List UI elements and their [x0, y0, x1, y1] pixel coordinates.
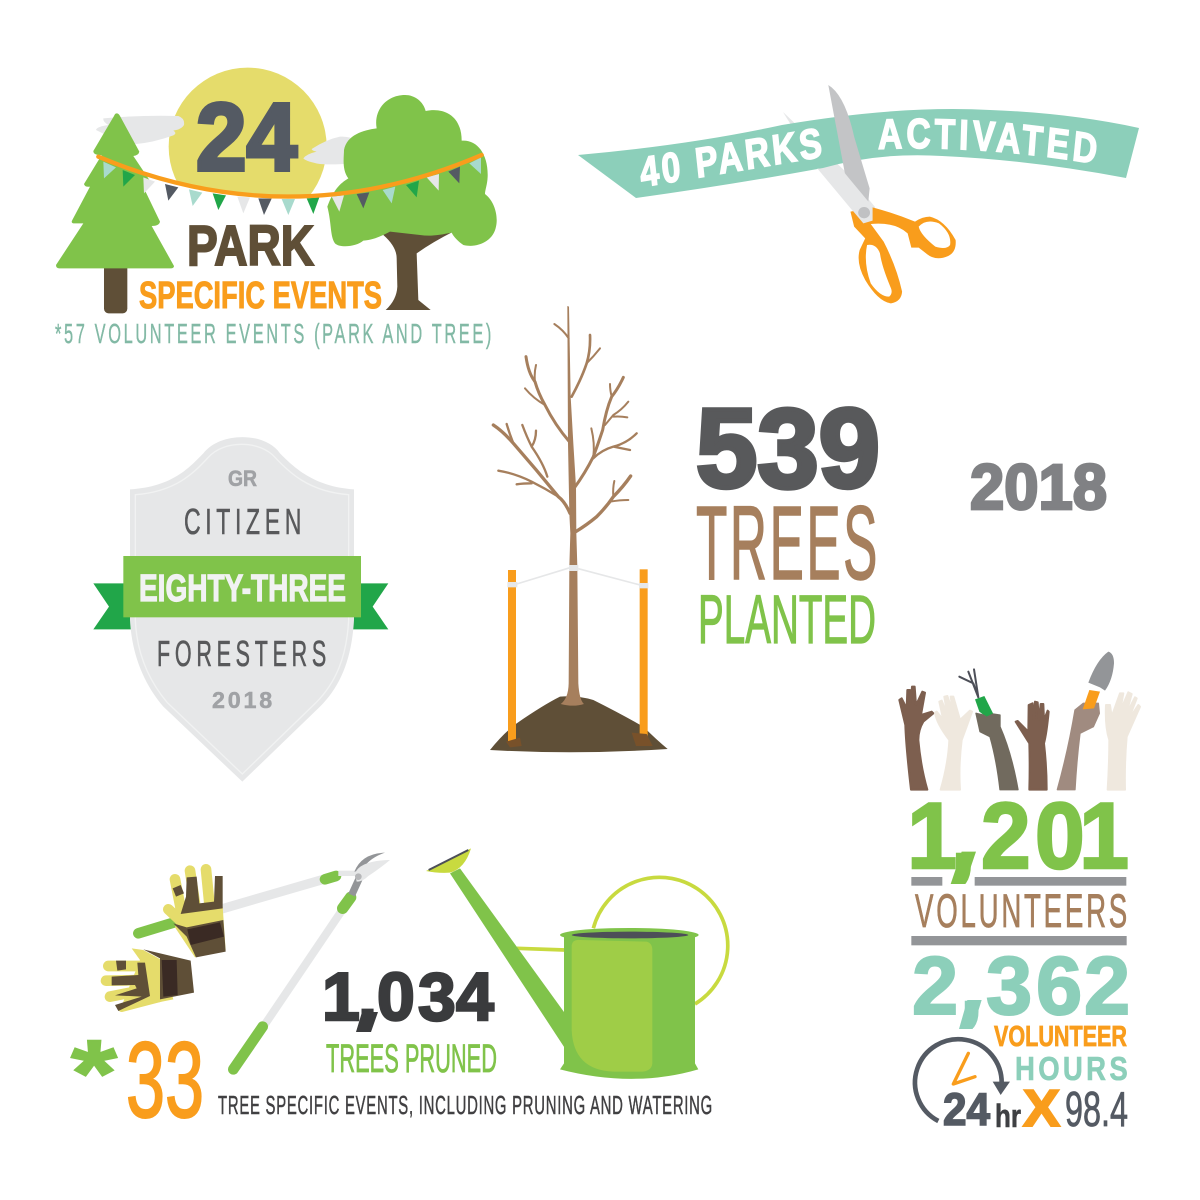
ribbon tails — [93, 583, 388, 629]
bunting flags — [103, 157, 481, 215]
label: PLANTED: PLANTED — [698, 581, 876, 658]
cloud: left — [96, 116, 184, 144]
rake tool — [959, 669, 993, 717]
formula: 24hr x 98.4 — [943, 1080, 1128, 1138]
icon: asterisk: * — [71, 1020, 117, 1126]
text: 2018: 2018 — [212, 687, 275, 713]
label: HOURS: HOURS — [1015, 1050, 1131, 1087]
spout — [450, 868, 565, 1048]
illustration: raised hands with tools — [899, 652, 1140, 790]
scissors: back blade — [783, 112, 875, 223]
glove: upper — [168, 869, 226, 957]
text: EIGHTY-THREE: EIGHTY-THREE — [139, 568, 346, 610]
formula: 24hr x 98.4: X — [1023, 1080, 1060, 1138]
label: TREES PRUNED: TREES PRUNED — [326, 1037, 497, 1081]
ribbon — [578, 109, 1139, 198]
spout rose — [426, 848, 471, 873]
text: TREES — [696, 485, 880, 602]
sun — [168, 68, 326, 194]
text: GR: GR — [228, 466, 257, 491]
formula: 24hr x 98.4: 98.4 — [1065, 1083, 1128, 1137]
hand 1 — [899, 687, 933, 790]
hand 4 — [1016, 702, 1049, 790]
text: FORESTERS: FORESTERS — [157, 633, 331, 674]
formula: 24hr x 98.4: 24 — [943, 1084, 990, 1135]
ribbon text: 40 PARKS — [640, 118, 1097, 186]
panel: tree events stats — [71, 959, 713, 1140]
hand 2 — [935, 696, 972, 790]
panel: citizen foresters shield — [93, 437, 388, 782]
ribbon text: ACTIVATED: ACTIVATED — [878, 118, 1097, 163]
hand 3 — [976, 713, 1018, 790]
panel: 40 parks activated ribbon — [578, 85, 1139, 304]
formula: 24hr x 98.4: hr — [995, 1098, 1021, 1134]
scissors: pivot — [858, 207, 870, 218]
illustration: planted sapling — [490, 306, 668, 752]
note: volunteer events: *57 VOLUNTEER EVENTS (PARK AND TREE) — [55, 318, 494, 349]
hand 5 — [1057, 703, 1099, 790]
caption: tree specific events: TREE SPECIFIC EVENTS, INCLUDING PRUNING AND WATERING — [218, 1090, 713, 1120]
number: 33: 33 — [126, 1019, 204, 1140]
divider bars and commas — [911, 852, 1127, 1029]
icon: clock — [915, 1039, 1010, 1121]
panel: volunteer stats — [907, 784, 1131, 1138]
number: 24: 24 — [196, 84, 297, 191]
cloud: right — [303, 137, 357, 164]
can body — [560, 935, 698, 1079]
trowel tool — [1083, 652, 1114, 709]
scissors: gray blade — [828, 85, 870, 203]
icon: pine tree — [56, 113, 174, 313]
tree ties — [507, 565, 648, 588]
garland string — [98, 155, 482, 197]
loppers — [138, 853, 390, 1069]
highlight panel — [572, 940, 652, 1072]
number: 1,201: 1,201 — [907, 784, 1129, 889]
label: VOLUNTEER: VOLUNTEER — [994, 1021, 1127, 1053]
soil mound — [490, 696, 668, 752]
can rim — [560, 928, 699, 942]
number: 2,362: 2,362 — [912, 939, 1130, 1032]
ribbon text: 40 PARKS: 40 PARKS — [640, 128, 822, 186]
tree trunk and branches — [493, 306, 637, 706]
stake dirt — [506, 733, 653, 747]
text: CITIZEN: CITIZEN — [184, 501, 306, 542]
scissors: orange handles — [850, 207, 956, 303]
can handle — [593, 877, 728, 1004]
icon: watering can — [426, 848, 728, 1079]
number: 539: 539 — [696, 386, 880, 511]
panel: trees planted stat — [696, 386, 880, 658]
illustration: loppers and gloves — [106, 853, 390, 1069]
icon: oak tree — [327, 95, 497, 310]
heading: SPECIFIC EVENTS: SPECIFIC EVENTS — [139, 275, 382, 317]
scissors: light blade base — [817, 168, 873, 223]
badge shape — [93, 437, 388, 782]
shield — [130, 437, 354, 782]
scissors: front blade and handles — [817, 85, 956, 303]
support stakes — [508, 569, 648, 742]
year: 2018: 2018 — [970, 451, 1107, 523]
hand 6 — [1106, 692, 1140, 790]
panel: park events scene — [55, 68, 497, 349]
heading: PARK: PARK — [187, 214, 314, 278]
glove: lower — [106, 948, 194, 1011]
number: 1,034: 1,034 — [322, 959, 494, 1035]
green banner — [123, 556, 361, 617]
illustration: sun, clouds, trees and bunting — [56, 68, 497, 313]
